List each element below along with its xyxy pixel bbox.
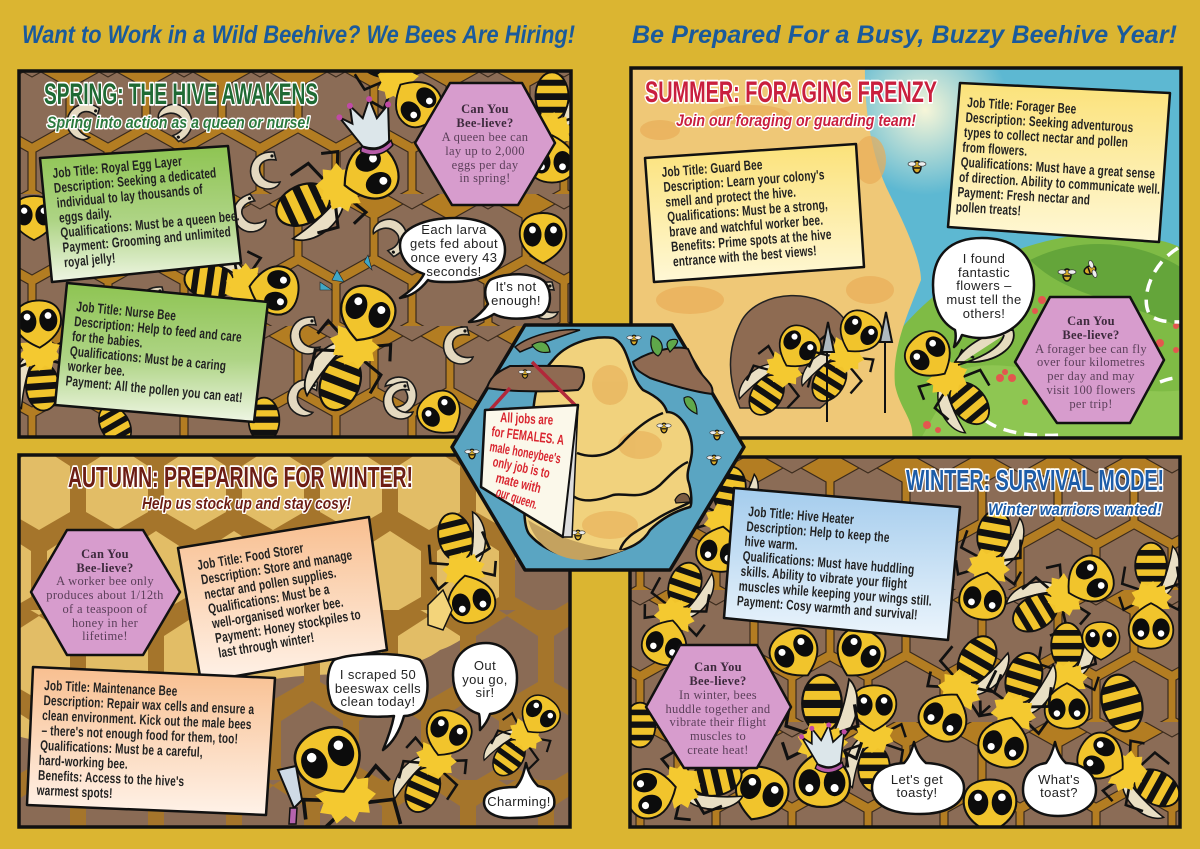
speech bubble: each larva [400,218,505,298]
job card: food storer [178,517,387,682]
job card: royal egg layer: eggs daily. [58,205,112,226]
job card: forager bee: from flowers. [962,139,1028,159]
spear: left [822,322,834,422]
job card: royal egg layer: Job Title: Royal Egg Layer [52,153,183,181]
job card: forager bee: types to collect nectar and pollen [964,124,1129,150]
fact hexagon: winter: Can You [694,660,742,674]
bee: guard one [738,324,822,416]
bee: top right [354,72,441,128]
fact hexagon: winter: create heat! [687,743,749,757]
sign with hanging string: only job is to [491,453,551,481]
fact hexagon: spring: in spring! [459,171,511,185]
job card: food storer: Job Title: Food Storer [196,540,305,573]
fact hexagon: autumn: lifetime! [82,629,128,643]
panel: autumn [15,455,575,849]
panel: winter [619,457,1194,833]
job card: hive heater [724,488,960,640]
job card: food storer: Description: Store and manage [200,547,353,588]
speech bubble: toasty: Let's get [891,772,943,787]
branch: left [487,366,584,391]
job card: royal egg layer: Qualifications: Must be a queen bee. [60,208,240,241]
job card: forager bee: Description: Seeking adventurous [965,109,1134,136]
panel: summer [629,66,1183,440]
job card: nurse bee: Payment: All the pollen you can eat! [65,373,243,406]
heading: autumn: AUTUMN: PREPARING FOR WINTER! [68,462,413,494]
job card: maintenance bee: – there's not enough food for them, too! [41,722,238,747]
job card: forager bee: Job Title: Forager Bee [967,94,1077,117]
bee: right edge [520,213,566,263]
bee: middle [392,709,473,813]
job card: food storer: Qualifications: Must be a [207,581,331,617]
speech bubble: not enough [469,274,550,322]
crown: winter queen [799,722,847,773]
job card: guard bee: smell and protect the hive. [665,184,797,210]
sign with hanging string: mate with [494,469,543,496]
fact hexagon: spring: Bee-lieve? [456,116,514,130]
sign with hanging string: male honeybee's [488,438,562,466]
job card: hive heater: hive warm. [744,533,799,553]
small bees [465,335,724,540]
job card: nurse bee [55,283,268,422]
job card: guard bee: Description: Learn your colony's [663,167,825,195]
job card: royal egg layer: Description: Seeking a dedicated [53,165,217,196]
bee: bottom [416,390,461,434]
bee: wax carrier [428,510,498,624]
bee: right [483,694,561,776]
subheading: summer: Join our foraging or guarding team! [676,111,916,130]
speech bubble: scraped: clean today! [341,694,415,709]
fact hexagon: autumn: of a teaspoon of [63,602,148,616]
bee abdomen: bottom [248,396,280,436]
job card: forager bee: Qualifications: Must have a great sense [960,154,1156,182]
bee abdomen: bottom left [98,410,132,436]
sweat drops [320,255,372,290]
speech bubble: charming: Charming! [487,794,551,809]
heading: spring: SPRING: THE HIVE AWAKENS [44,78,318,111]
job card: guard bee: Qualifications: Must be a strong, [667,196,828,225]
fact hexagon: autumn: A worker bee only [56,574,154,588]
bee: middle horizontal [184,250,300,316]
subheading: autumn: Help us stock up and stay cosy! [142,494,351,513]
sign with hanging string: for FEMALES. A [491,423,565,448]
job card: maintenance bee: Qualifications: Must be a careful, [40,737,203,760]
job card: maintenance bee: clean environment. Kick out the male bees [42,707,252,733]
fact hexagon: winter: vibrate their flight [670,715,767,729]
job card: guard bee: Job Title: Guard Bee [661,156,763,180]
fact hexagon: spring: A queen bee can [442,130,529,144]
job card: hive heater: Job Title: Hive Heater [748,503,855,528]
fact hexagon: autumn [31,530,180,655]
fact hexagon: spring [415,83,555,205]
central hexagon: wild beehive [452,325,744,570]
fact hexagon: winter: Bee-lieve? [689,674,747,688]
panel: spring [17,69,573,439]
fact hexagon: summer: visit 100 flowers [1046,383,1136,397]
hive entrance [675,493,690,503]
job card: guard bee: Benefits: Prime spots at the hive [670,226,832,255]
speech bubble: found flowers [933,238,1034,347]
speech bubble: toasty [872,742,964,814]
fact hexagon: summer: per trip! [1069,397,1113,411]
job card: hive heater: Payment: Cosy warmth and survival! [736,593,918,623]
job card: food storer: Payment: Honey stockpiles to [214,606,362,646]
speech bubble: each larva: once every 43 [411,250,497,265]
fact hexagon: summer: A forager bee can fly [1035,342,1147,356]
fact hexagon: autumn: honey in her [72,616,139,630]
speech bubble: scraped: beeswax cells [335,681,421,696]
tunnel entrance [730,296,845,408]
heading: summer: SUMMER: FORAGING FRENZY [645,76,937,109]
title: left page: Want to Work in a Wild Beehive? We Bees Are Hiring! [22,21,575,49]
leaves [532,336,697,414]
job card: nurse bee: Qualifications: Must be a caring [69,343,227,374]
job card: forager bee: of direction. Ability to communicate well. [959,169,1161,197]
upper branch [515,330,580,352]
job card: hive heater: skills. Ability to vibrate your flight [740,563,908,592]
fact hexagon: summer: per day and may [1047,369,1135,383]
job card: guard bee: brave and watchful worker bee. [669,212,824,240]
job card: maintenance bee: hard-working bee. [38,752,128,772]
spear: right [880,312,892,413]
subheading: winter: Winter warriors wanted! [988,500,1162,519]
fact hexagon: spring: Can You [461,102,509,116]
fact hexagon: autumn: Bee-lieve? [76,561,134,575]
branch: right [633,348,713,394]
job card: guard bee: entrance with the best views! [672,242,817,270]
fact hexagon: autumn: produces about 1/12th [46,588,164,602]
job card: royal egg layer [40,146,243,282]
job card: royal egg layer: individual to lay thousands of [56,181,204,211]
fact hexagon: autumn: Can You [81,547,129,561]
speech bubble: toasty: toasty! [896,785,938,800]
fact hexagon: winter: In winter, bees [679,688,757,702]
hive [524,337,692,560]
bee: scraper [294,726,402,826]
speech bubble: found flowers: others! [963,306,1005,321]
fact hexagon: summer: Bee-lieve? [1062,328,1120,342]
job card: nurse bee: Description: Help to feed and care [74,313,243,345]
subheading: spring: Spring into action as a queen or nurse! [47,113,310,132]
speech bubble: each larva: seconds! [426,264,482,279]
speech bubble: each larva: Each larva [421,222,487,237]
fact hexagon: spring: lay up to 2,000 [445,144,525,158]
speech bubble: each larva: gets fed about [410,236,498,251]
crown: spring queen [334,93,398,159]
job card: maintenance bee [27,667,275,815]
job card: forager bee: pollen treats! [955,199,1021,219]
speech bubble: found flowers: must tell the [946,292,1022,307]
fact hexagon: winter [646,645,791,768]
speech bubble: out you go [453,643,517,730]
job card: nurse bee: worker bee. [66,358,126,379]
bee: nurse [304,284,397,412]
job card: hive heater: Qualifications: Must have huddling [742,548,915,578]
job card: maintenance bee: Description: Repair wax cells and ensure a [43,692,255,718]
speech bubble: found flowers: fantastic [958,265,1010,280]
speech bubble: out you go: Out [474,658,496,673]
speech bubble: toast: What's [1038,772,1080,787]
job card: food storer: last through winter! [217,629,315,661]
speech bubble: toast: toast? [1040,785,1078,800]
fact hexagon: spring: eggs per day [452,158,519,172]
job card: royal egg layer: Payment: Grooming and unlimited [62,224,232,256]
bee: queen [275,146,400,242]
bee: left edge lower [20,300,62,412]
job card: guard bee [645,144,864,282]
job card: hive heater: Description: Help to keep the [746,518,890,546]
job card: food storer: well-organised worker bee. [210,594,345,632]
fact hexagon: summer [1015,297,1164,423]
job card: forager bee: Payment: Fresh nectar and [957,184,1091,208]
job card: maintenance bee: Job Title: Maintenance Bee [44,677,178,699]
scraper tool [278,766,302,808]
flowers [923,296,1179,433]
job card: forager bee [948,83,1170,242]
speech bubble: found flowers: I found [963,251,1005,266]
flight path dashed [985,248,1182,435]
title: right page: Be Prepared For a Busy, Buzzy Beehive Year! [632,21,1177,49]
bee: guard two [801,310,882,402]
speech bubble: not enough: enough! [491,293,541,308]
job card: maintenance bee: warmest spots! [36,782,113,802]
speech bubble: toast [1023,742,1096,816]
speech bubble: scraped [328,654,428,750]
fact hexagon: winter: huddle together and [666,702,771,716]
job card: royal egg layer: royal jelly! [63,250,116,271]
job card: food storer: nectar and pollen supplies. [203,565,338,603]
fact hexagon: summer: over four kilometres [1037,355,1145,369]
fact hexagon: summer: Can You [1067,314,1115,328]
fact hexagon: winter: muscles to [690,729,746,743]
bee: left edge upper [20,195,46,241]
speech bubble: out you go: sir! [476,685,494,700]
bee: top right corner [534,72,570,184]
sign with hanging string: our queen. [494,484,540,512]
job card: hive heater: muscles while keeping your wings still. [738,578,933,609]
speech bubble: scraped: I scraped 50 [340,667,416,682]
bee: forager [904,330,990,434]
job card: maintenance bee: Benefits: Access to the hive's [38,767,185,790]
forager wings [955,330,1014,365]
speech bubble: not enough: It's not [495,279,537,294]
speech bubble: charming [484,763,554,818]
speech bubble: found flowers: flowers – [956,278,1012,293]
job card: nurse bee: for the babies. [71,328,144,351]
speech bubble: out you go: you go, [462,672,508,687]
sign with hanging string [481,362,578,537]
sign with hanging string: All jobs are [500,409,554,428]
job card: nurse bee: Job Title: Nurse Bee [76,298,177,324]
